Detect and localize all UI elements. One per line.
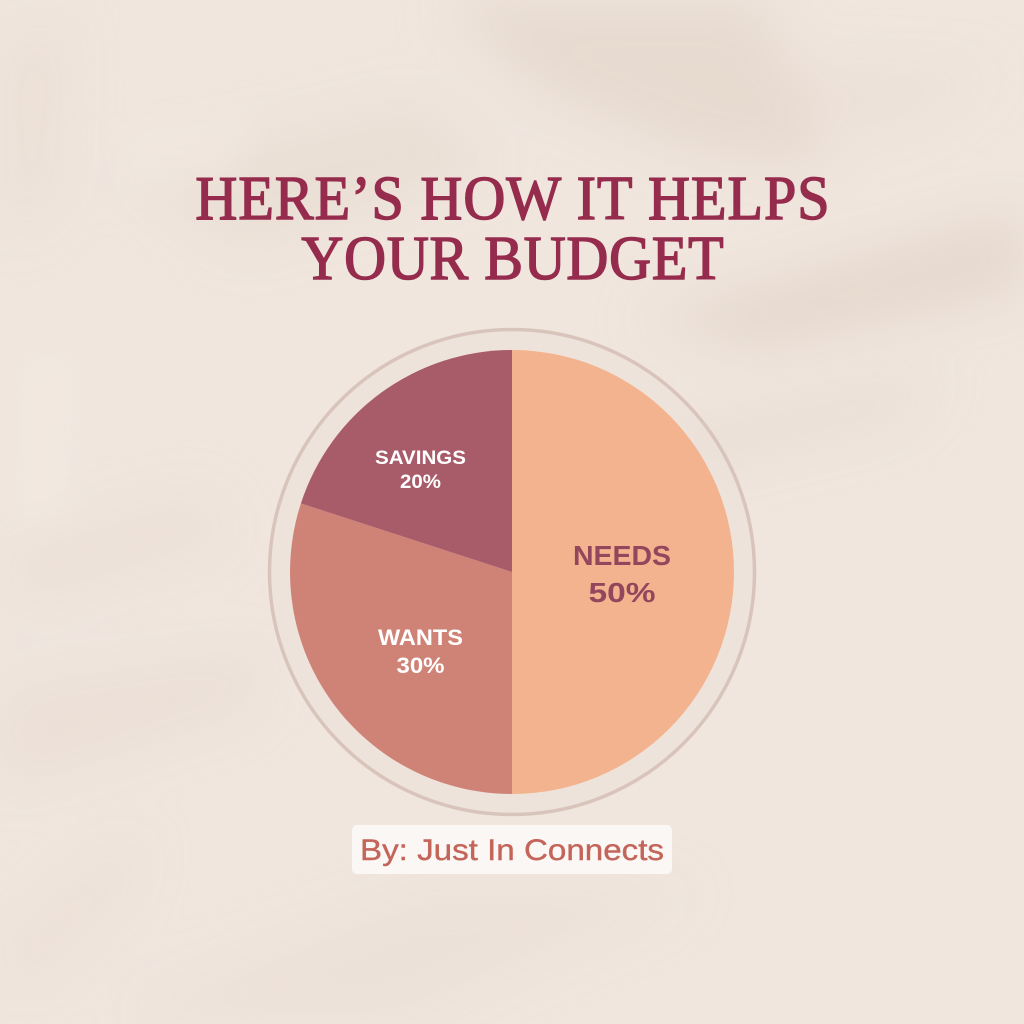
label: needs: NEEDS (573, 540, 671, 571)
label: needs: 50% (588, 577, 656, 608)
attribution badge: By: Just In Connects (360, 834, 664, 867)
label: needs (573, 540, 671, 608)
label: wants (378, 625, 463, 678)
attribution badge (352, 825, 672, 874)
pie chart: budget split (270, 330, 754, 814)
label: wants: WANTS (378, 625, 463, 650)
label: wants: 30% (396, 653, 444, 678)
title (195, 164, 830, 293)
label: savings: SAVINGS (375, 448, 466, 469)
slice: wants 30% (290, 503, 512, 794)
label: savings (375, 448, 466, 493)
slice: needs 50% (512, 350, 734, 794)
label: savings: 20% (400, 472, 441, 493)
title: HERE’S HOW IT HELPS (195, 164, 830, 233)
title: YOUR BUDGET (301, 224, 724, 293)
slice: savings 20% (301, 350, 512, 572)
outer ring (270, 330, 754, 814)
